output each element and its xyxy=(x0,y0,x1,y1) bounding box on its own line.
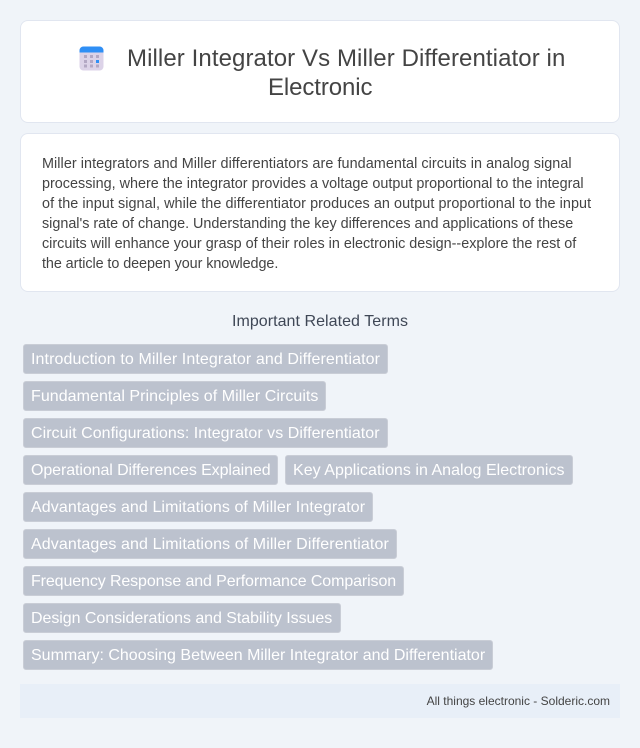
tag: Design Considerations and Stability Issues xyxy=(31,610,332,627)
heading xyxy=(127,45,565,101)
tag xyxy=(23,603,341,633)
icon: calendar xyxy=(80,46,104,70)
tag: Advantages and Limitations of Miller Integrator xyxy=(31,499,365,516)
intro paragraph: Miller integrators and Miller differentiators are fundamental circuits in analog signal xyxy=(42,156,572,172)
tag: Frequency Response and Performance Comparison xyxy=(31,573,396,590)
tag xyxy=(23,566,404,596)
tag xyxy=(23,492,373,522)
tag: Fundamental Principles of Miller Circuits xyxy=(31,388,318,405)
intro paragraph: the article to deepen your knowledge. xyxy=(42,256,278,272)
intro paragraph: circuits will enhance your grasp of their roles in electronic design--explore the rest of xyxy=(42,236,576,252)
intro paragraph: of the input signal, while the differentiator produces an output proportional to the input xyxy=(42,196,591,212)
footer bar xyxy=(20,684,620,718)
related terms tags xyxy=(23,344,573,670)
intro paragraph: processing, where the integrator provides a voltage output proportional to the integral xyxy=(42,176,584,192)
footer text: All things electronic - Solderic.com xyxy=(427,694,610,708)
intro text panel xyxy=(20,133,620,292)
intro paragraph xyxy=(42,156,592,272)
tag xyxy=(285,455,573,485)
tag xyxy=(23,529,397,559)
intro paragraph: signal's rate of change. Understanding the key differences and applications of these xyxy=(42,216,573,232)
tag xyxy=(23,344,388,374)
tag: Key Applications in Analog Electronics xyxy=(293,462,565,479)
tag: Advantages and Limitations of Miller Differentiator xyxy=(31,536,389,553)
related terms heading: Important Related Terms xyxy=(232,313,408,330)
tag xyxy=(23,640,493,670)
tag: Circuit Configurations: Integrator vs Differentiator xyxy=(31,425,380,442)
title panel xyxy=(20,20,620,123)
tag: Summary: Choosing Between Miller Integrator and Differentiator xyxy=(31,647,485,664)
tag xyxy=(23,418,388,448)
tag xyxy=(23,455,278,485)
heading: Electronic xyxy=(268,74,372,101)
tag: Operational Differences Explained xyxy=(31,462,271,479)
heading: Miller Integrator Vs Miller Differentiator in xyxy=(127,45,565,72)
tag xyxy=(23,381,326,411)
tag: Introduction to Miller Integrator and Differentiator xyxy=(31,351,380,368)
